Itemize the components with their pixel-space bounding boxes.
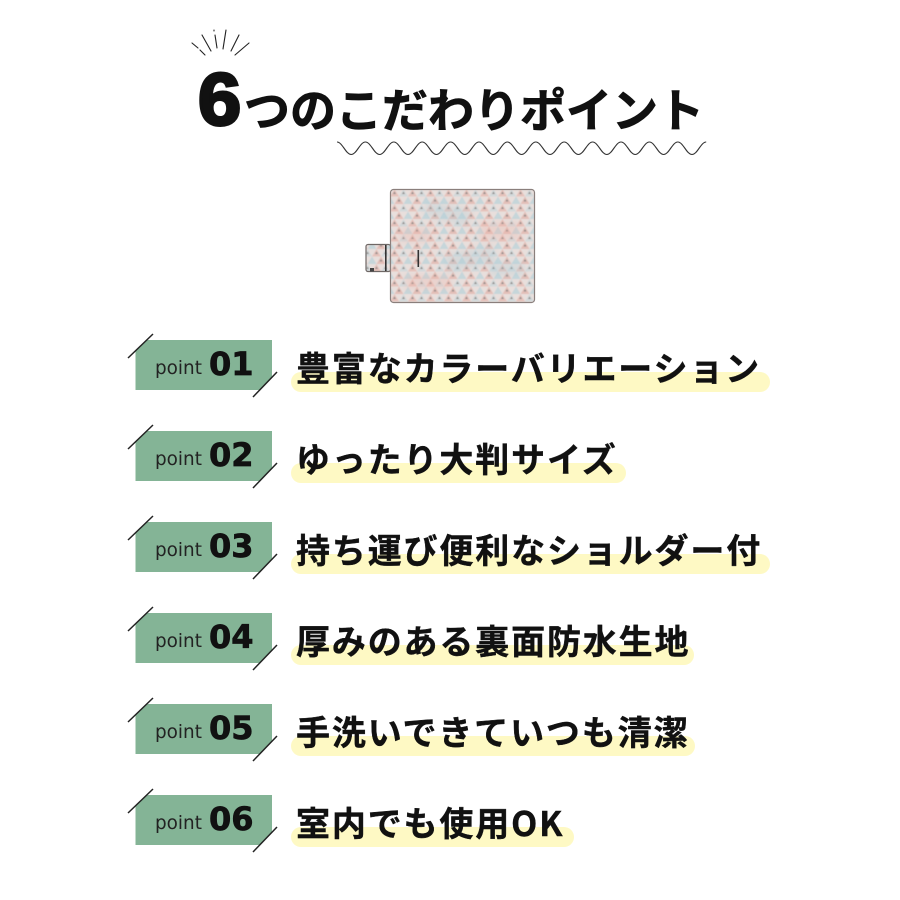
badge 04: 04	[209, 618, 254, 656]
title: つのこだわりポイント	[244, 75, 704, 141]
highlight 01	[291, 372, 770, 392]
row: point 02	[128, 424, 626, 488]
icon: sparkle rays	[192, 30, 250, 56]
text 03: 持ち運び便利なショルダー付	[296, 524, 762, 572]
badge 05	[128, 698, 278, 762]
badge 03	[128, 516, 278, 580]
text 06: 室内でも使用OK	[296, 796, 564, 846]
row: point 01	[128, 334, 770, 398]
title: 6	[198, 58, 241, 141]
highlight 03	[291, 554, 770, 574]
row: point 06	[128, 788, 574, 852]
mat body	[390, 190, 534, 302]
badge 01: 01	[209, 345, 254, 383]
text 01: 豊富なカラーバリエーション	[296, 342, 761, 390]
badge 02: point	[155, 449, 202, 470]
badge 02: 02	[209, 436, 254, 474]
text 02: ゆったり大判サイズ	[296, 432, 618, 482]
picnic mat illustration	[365, 188, 536, 304]
badge 06	[128, 788, 278, 852]
badge 06: point	[155, 813, 202, 834]
wavy underline	[337, 142, 706, 155]
badge 01: point	[155, 358, 202, 379]
row: point 05	[128, 698, 695, 762]
row: point 04	[128, 606, 694, 670]
badge 04	[128, 606, 278, 670]
badge 03: point	[155, 540, 202, 561]
highlight 05	[291, 736, 695, 756]
highlight 02	[291, 463, 626, 483]
highlight 04	[291, 645, 694, 665]
badge 04: point	[155, 631, 202, 652]
badge 05: point	[155, 722, 202, 743]
highlight 06	[291, 827, 574, 847]
row: point 03	[128, 516, 770, 580]
text 05: 手洗いできていつも清潔	[296, 706, 689, 754]
badge 05: 05	[209, 709, 254, 747]
badge 06: 06	[209, 800, 254, 838]
badge 01	[128, 334, 278, 398]
text 04: 厚みのある裏面防水生地	[296, 614, 690, 664]
badge 03: 03	[209, 527, 254, 565]
badge 02	[128, 424, 278, 488]
mat flap	[366, 244, 390, 272]
